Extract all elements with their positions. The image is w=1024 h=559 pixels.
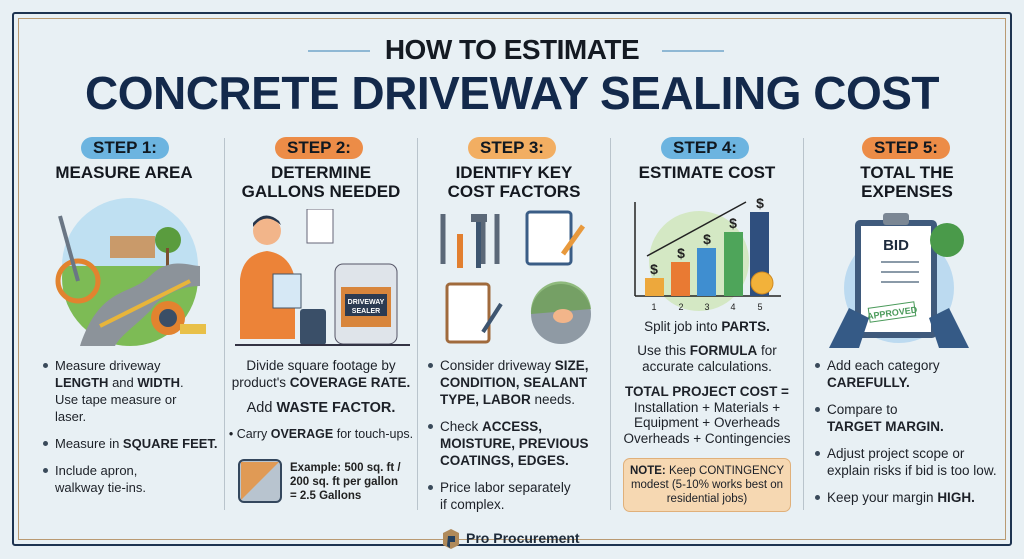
step 1 text — [43, 358, 218, 495]
step 5 text — [815, 358, 997, 505]
step 5 heading — [860, 163, 954, 201]
step 1 pill: STEP 1: — [93, 138, 157, 157]
step 4 text: Equipment + Overheads — [634, 415, 780, 430]
step 3 text: if complex. — [440, 497, 505, 512]
icon: approved bid clipboard — [829, 213, 969, 348]
step 1 text: LENGTH and WIDTH. — [55, 375, 184, 390]
logo: pro procurement: Pro Procurement — [466, 530, 580, 546]
icon: person with sealer — [235, 209, 410, 346]
bar chart: 2 — [678, 302, 684, 312]
step 2 text: Add WASTE FACTOR. — [247, 400, 395, 416]
step 3 text: Consider driveway SIZE, CONDITION, SEALANT TYPE, LABOR needs. — [440, 358, 589, 407]
step 5 pill: STEP 5: — [874, 138, 938, 157]
step 4 text: accurate calculations. — [642, 359, 772, 374]
step 5 text: CAREFULLY. — [827, 375, 910, 390]
panel: step 2 — [229, 137, 413, 503]
step 4 text: TOTAL PROJECT COST = — [625, 384, 789, 399]
step 3 text: Price labor separately — [440, 480, 571, 495]
step 5 text: TARGET MARGIN. — [827, 419, 944, 434]
bar chart: 5 — [757, 302, 763, 312]
icon: approved bid clipboard: APPROVED — [866, 304, 918, 321]
step 2 heading: DETERMINE — [271, 163, 371, 182]
icon: approved bid clipboard: BID — [883, 237, 909, 254]
step 1 text: laser. — [55, 409, 86, 424]
step 3 text: MOISTURE, PREVIOUS COATINGS, EDGES. — [440, 436, 589, 468]
example box — [238, 459, 401, 503]
step 2 pill — [275, 137, 363, 159]
step 3 text: Check ACCESS, — [440, 419, 542, 434]
logo: pro procurement — [443, 529, 580, 549]
step 2 heading: GALLONS NEEDED — [242, 182, 400, 201]
step 1 text: Use tape measure or — [55, 392, 176, 407]
step 5 heading: TOTAL THE — [860, 163, 954, 182]
panel: step 3 — [428, 137, 591, 512]
bar chart: 1 — [651, 302, 657, 312]
step 4 text: Installation + Materials + — [634, 400, 780, 414]
step 3 heading: IDENTIFY KEY — [456, 163, 572, 182]
step 5 text: Adjust project scope or explain risks if bid is too low. — [827, 446, 997, 478]
step 3 pill — [468, 137, 556, 159]
step 4 pill: STEP 4: — [673, 138, 737, 157]
example box: = 2.5 Gallons — [290, 490, 361, 502]
icon: driveway scene — [56, 198, 206, 346]
step 3 text — [428, 358, 589, 512]
step 5 text: Keep your margin HIGH. — [827, 490, 975, 505]
step 2 text: Divide square footage by product's COVERAGE RATE. — [232, 358, 410, 390]
panel: step 1 — [43, 137, 218, 495]
step 5 heading: EXPENSES — [861, 182, 953, 201]
icon: tools and checklists — [440, 210, 591, 344]
step 3 heading: COST FACTORS — [448, 182, 580, 201]
step 1 heading: MEASURE AREA — [55, 163, 193, 182]
step 1 pill — [81, 137, 169, 159]
step 4 text: Overheads + Contingencies — [624, 430, 790, 446]
step 2 pill: STEP 2: — [287, 138, 351, 157]
step 4 heading: ESTIMATE COST — [639, 163, 775, 182]
bar chart — [634, 196, 781, 312]
bar chart: 4 — [730, 302, 736, 312]
panel: step 4 — [623, 137, 791, 512]
step 5 pill — [862, 137, 950, 159]
step 3 pill: STEP 3: — [480, 138, 544, 157]
step 2 text — [229, 358, 413, 441]
bar chart: $ — [703, 231, 711, 247]
bar chart: 3 — [704, 302, 710, 312]
panel: step 5 — [815, 137, 997, 505]
subtitle: how to estimate: HOW TO ESTIMATE — [385, 34, 639, 65]
callout: note — [623, 458, 791, 512]
step 4 text: Split job into PARTS. — [644, 319, 770, 334]
step 5 text: Compare to — [827, 402, 898, 417]
callout: note: NOTE: Keep CONTINGENCY modest (5-10% works best on residential jobs) — [630, 465, 784, 505]
step 2 heading — [242, 163, 400, 201]
step 5 text: Add each category — [827, 358, 940, 373]
example box: 200 sq. ft per gallon — [290, 476, 398, 488]
step 4 pill — [661, 137, 749, 159]
bar chart: $ — [650, 261, 658, 277]
title: CONCRETE DRIVEWAY SEALING COST — [85, 67, 939, 119]
step 1 text: Include apron, — [55, 463, 137, 478]
step 1 text: walkway tie-ins. — [55, 480, 146, 495]
example box: Example: 500 sq. ft / — [290, 462, 401, 474]
step 4 text: Use this FORMULA for — [637, 343, 777, 358]
step 3 heading — [448, 163, 580, 201]
step 2 text: • Carry OVERAGE for touch-ups. — [229, 427, 413, 441]
icon: person with sealer: SEALER — [352, 308, 380, 315]
bar chart: $ — [729, 215, 737, 231]
step 1 text: Measure in SQUARE FEET. — [55, 436, 218, 451]
step 4 text — [624, 319, 790, 446]
icon: person with sealer: DRIVEWAY — [348, 299, 385, 306]
bar chart: $ — [677, 245, 685, 261]
step 1 text: Measure driveway — [55, 358, 160, 373]
